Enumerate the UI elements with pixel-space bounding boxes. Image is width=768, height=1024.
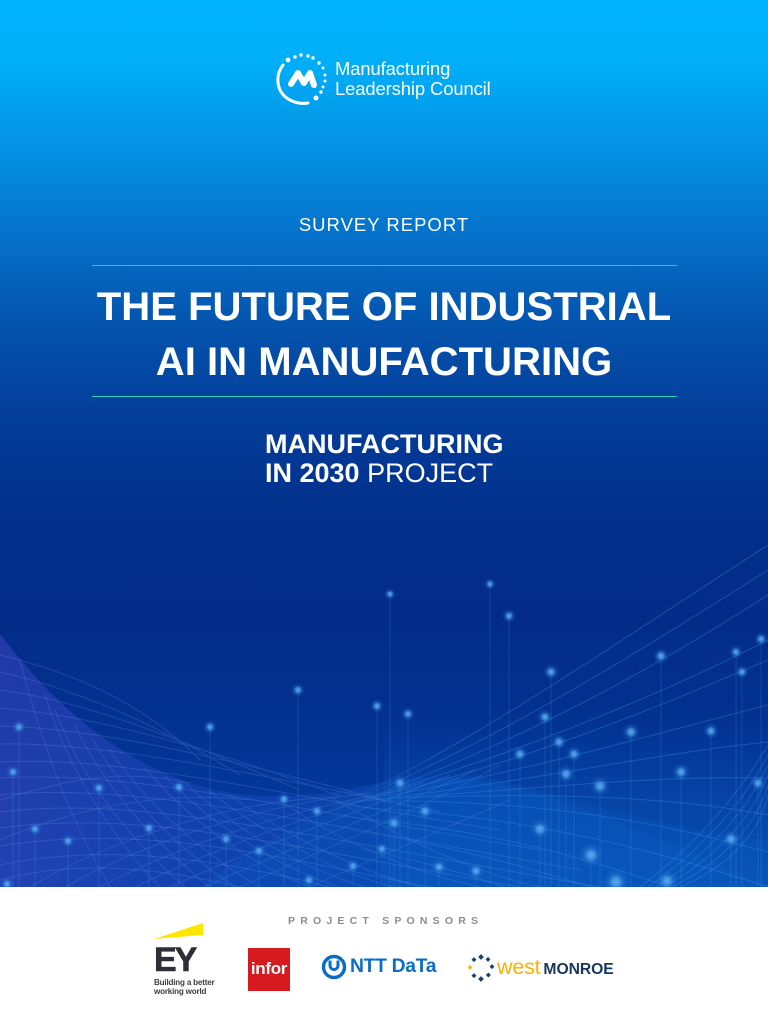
Infor logo	[248, 948, 290, 991]
West Monroe star icon	[468, 954, 494, 982]
West Monroe wordmark: westMONROE	[497, 955, 614, 979]
EY tagline	[154, 978, 215, 996]
title	[97, 285, 671, 384]
survey report label: SURVEY REPORT	[299, 214, 469, 235]
logo mark	[276, 53, 326, 105]
EY logo	[154, 923, 215, 996]
title: THE FUTURE OF INDUSTRIAL	[97, 285, 671, 329]
mesh lines: right fan	[320, 545, 768, 887]
mesh lines: lower right corner	[640, 745, 768, 887]
subtitle	[265, 429, 503, 488]
rule below title	[92, 396, 677, 397]
mesh surface	[0, 634, 768, 887]
logo wordmark: Manufacturing	[335, 58, 450, 79]
mesh lines: left horizontal	[0, 655, 600, 887]
EY beam	[154, 923, 203, 939]
Infor logo: infor	[251, 959, 287, 978]
EY letters: EY	[154, 941, 195, 979]
mesh lines: crossing diagonals	[0, 660, 540, 887]
rule above title	[92, 265, 677, 266]
title: AI IN MANUFACTURING	[156, 340, 612, 384]
vertical node stems	[13, 584, 761, 887]
NTT wordmark: NTT DaTa	[350, 956, 436, 977]
NTT icon	[322, 954, 346, 980]
EY tagline: working world	[154, 987, 206, 996]
NTT Data logo	[322, 954, 437, 980]
council logo	[276, 53, 491, 105]
sponsors band	[0, 887, 768, 1024]
West Monroe logo	[468, 954, 614, 982]
EY tagline: Building a better	[154, 978, 214, 987]
logo wordmark	[335, 58, 491, 99]
subtitle: MANUFACTURING	[265, 429, 503, 459]
logo wordmark: Leadership Council	[335, 78, 491, 99]
sponsors heading: PROJECT SPONSORS	[288, 915, 483, 927]
subtitle: IN 2030 PROJECT	[265, 458, 493, 488]
glowing nodes	[0, 578, 768, 895]
